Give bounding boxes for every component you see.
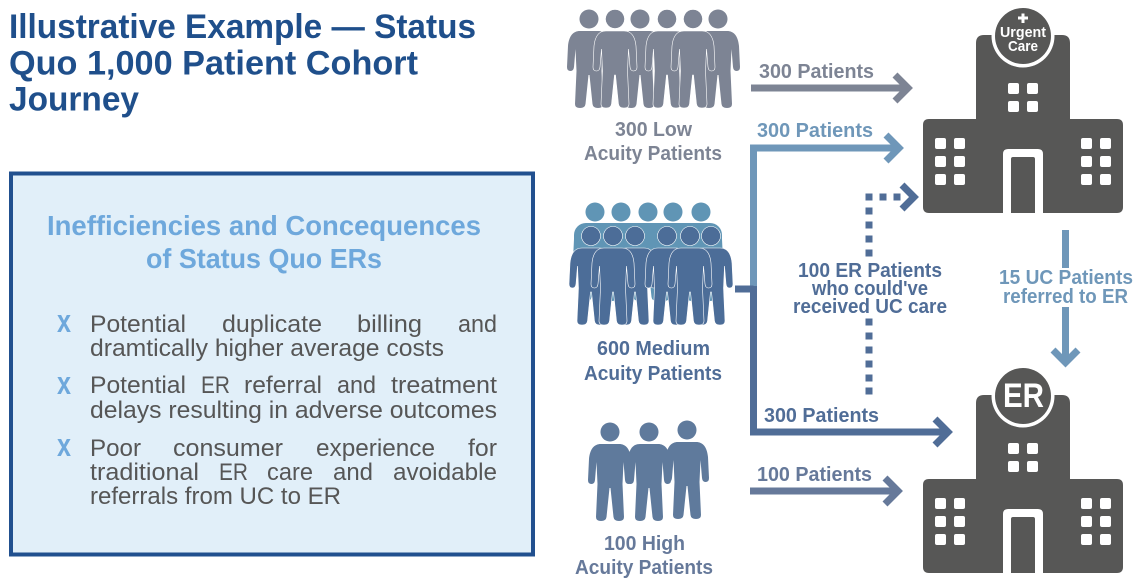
- bullet 2: Potential: [90, 372, 186, 399]
- bullet 3: [57, 427, 497, 510]
- urgent care label: Urgent: [1000, 24, 1046, 41]
- icon: urgent care building: [923, 4, 1123, 213]
- bullet 3: Poor: [90, 435, 141, 462]
- label: high acuity: [575, 533, 713, 579]
- label: low acuity: 300 Low: [615, 119, 692, 141]
- bullet 3: avoidable: [393, 459, 497, 486]
- label: 300 patients low: 300 Patients: [759, 61, 874, 83]
- icon: high acuity patients: [588, 420, 709, 521]
- bullet 1: and: [458, 311, 497, 338]
- arrow: high acuity to ER: [750, 478, 898, 504]
- arrow: low acuity to urgent care: [751, 75, 908, 101]
- label: medium acuity: [584, 338, 722, 385]
- bullet 3: for: [468, 435, 497, 462]
- ER label: ER: [1003, 377, 1044, 415]
- label: 100 ER patients: who could've: [811, 278, 928, 300]
- arrow: medium acuity to ER: [735, 286, 948, 445]
- bullet 1: duplicate: [222, 311, 322, 338]
- bullet 2: delays resulting in adverse outcomes: [90, 397, 497, 424]
- bullet 3: care: [267, 459, 313, 486]
- label: 100 patients: 100 Patients: [757, 464, 872, 486]
- label: 15 UC patients: [999, 267, 1133, 308]
- label: 15 UC patients: 15 UC Patients: [999, 267, 1133, 289]
- panel heading: Inefficiencies and Concequences: [47, 210, 481, 241]
- title: [9, 8, 476, 118]
- label: high acuity: 100 High: [604, 533, 685, 555]
- bullet 1: x: [57, 303, 71, 339]
- panel: inefficiencies and consequences: [11, 174, 533, 554]
- title: Quo 1,000 Patient Cohort: [9, 44, 418, 82]
- bullet 3: traditional: [90, 459, 199, 486]
- title: Journey: [9, 80, 139, 118]
- bullet 3: consumer: [173, 435, 283, 462]
- title: Illustrative Example — Status: [9, 8, 476, 46]
- label: 100 ER patients: received UC care: [793, 296, 947, 318]
- panel background: [11, 174, 533, 554]
- urgent care label: Care: [1008, 38, 1038, 55]
- panel heading: of Status Quo ERs: [146, 243, 382, 274]
- arrow: dotted ER patients to urgent care: [866, 185, 914, 394]
- label: 15 UC patients: referred to ER: [1003, 286, 1129, 308]
- label: low acuity: [584, 119, 722, 165]
- label: 100 ER patients: [793, 260, 947, 318]
- bullet 3: referrals from UC to ER: [90, 483, 341, 510]
- bullet 3: x: [57, 427, 71, 463]
- bullet 2: ER: [201, 372, 230, 399]
- bullet 2: referral: [244, 372, 322, 399]
- bullet 3: ER: [219, 459, 248, 486]
- bullet 3: and: [333, 459, 373, 486]
- label: medium acuity: Acuity Patients: [584, 363, 722, 385]
- icon: medium acuity patients: [569, 202, 733, 325]
- arrow: medium acuity to urgent care: [754, 135, 899, 289]
- icon: ER building: [923, 364, 1123, 573]
- bullet 3: experience: [316, 435, 435, 462]
- icon: low acuity patients: [567, 10, 740, 108]
- bullet 2: treatment: [391, 372, 497, 399]
- label: high acuity: Acuity Patients: [575, 557, 713, 579]
- label: medium acuity: 600 Medium: [597, 338, 710, 360]
- label: 300 patients to ER: 300 Patients: [764, 405, 879, 427]
- bullet 2: x: [57, 365, 71, 401]
- bullet 1: dramtically higher average costs: [90, 335, 444, 362]
- bullet 1: billing: [357, 311, 422, 338]
- bullet 1: [57, 303, 497, 362]
- panel heading: [47, 210, 481, 274]
- icon: plus: [1018, 14, 1028, 23]
- bullet 2: [57, 365, 497, 424]
- bullet 2: and: [337, 372, 376, 399]
- bullet 1: Potential: [90, 311, 186, 338]
- label: 100 ER patients: 100 ER Patients: [798, 260, 942, 282]
- label: 300 patients to urgent care: 300 Patients: [757, 120, 873, 142]
- arrow: urgent care to ER referral: [1053, 230, 1078, 362]
- urgent care label: [1000, 24, 1046, 55]
- label: low acuity: Acuity Patients: [584, 143, 722, 165]
